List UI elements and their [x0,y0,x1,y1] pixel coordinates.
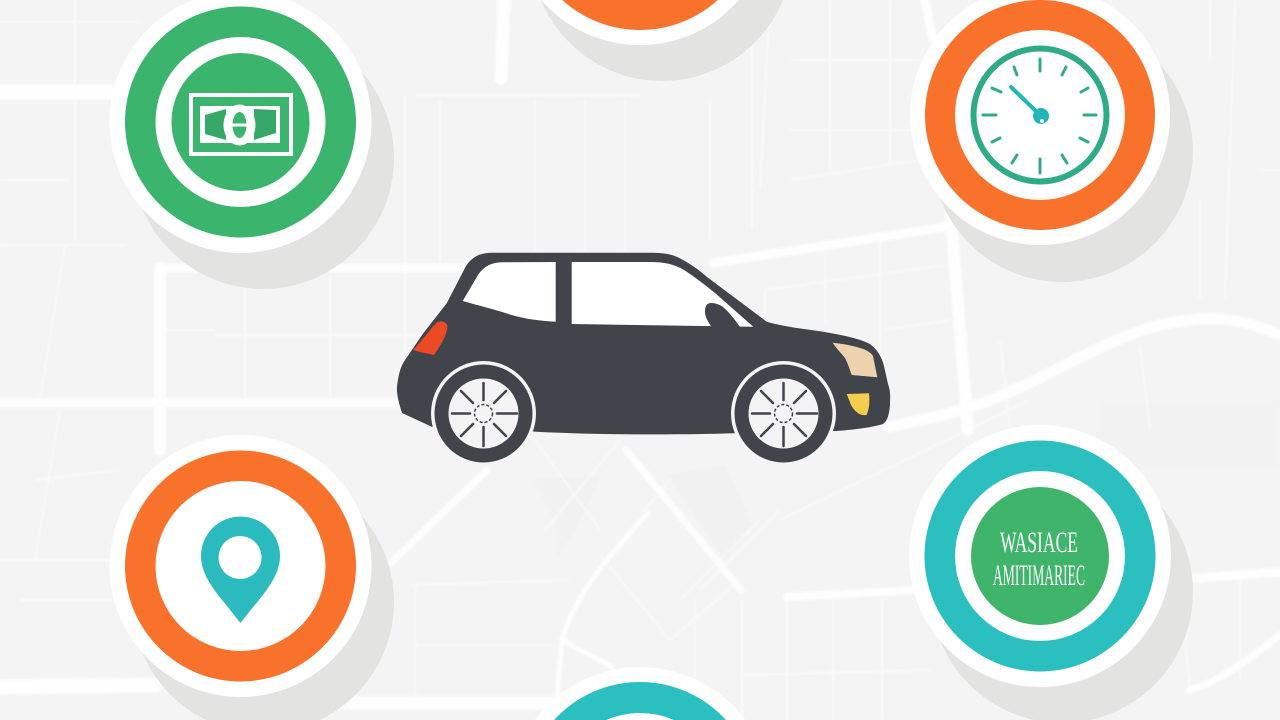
car illustration [397,253,890,466]
rear window [463,262,556,322]
fog light [847,393,869,415]
headlight [833,343,877,377]
rear wheel [431,361,536,466]
badge: bottom teal circle [535,667,745,720]
badge: insurance text [909,425,1193,720]
front wheel [731,361,836,466]
badge: insurance text: AMITIMARIEC [993,559,1085,592]
badge: money [110,0,394,289]
tail light [413,321,448,355]
label: garbled insurance text [993,526,1085,592]
badge: top orange circle [541,0,783,81]
badge: clock [910,0,1193,282]
front window [572,262,753,327]
icon: banknote [191,95,291,154]
icon: map pin [201,516,280,623]
badge: location pin [110,435,394,720]
label: garbled insurance text: WASIACE [1000,526,1078,559]
car body [397,253,890,434]
icon: clock face [974,48,1106,182]
side mirror [705,303,740,327]
